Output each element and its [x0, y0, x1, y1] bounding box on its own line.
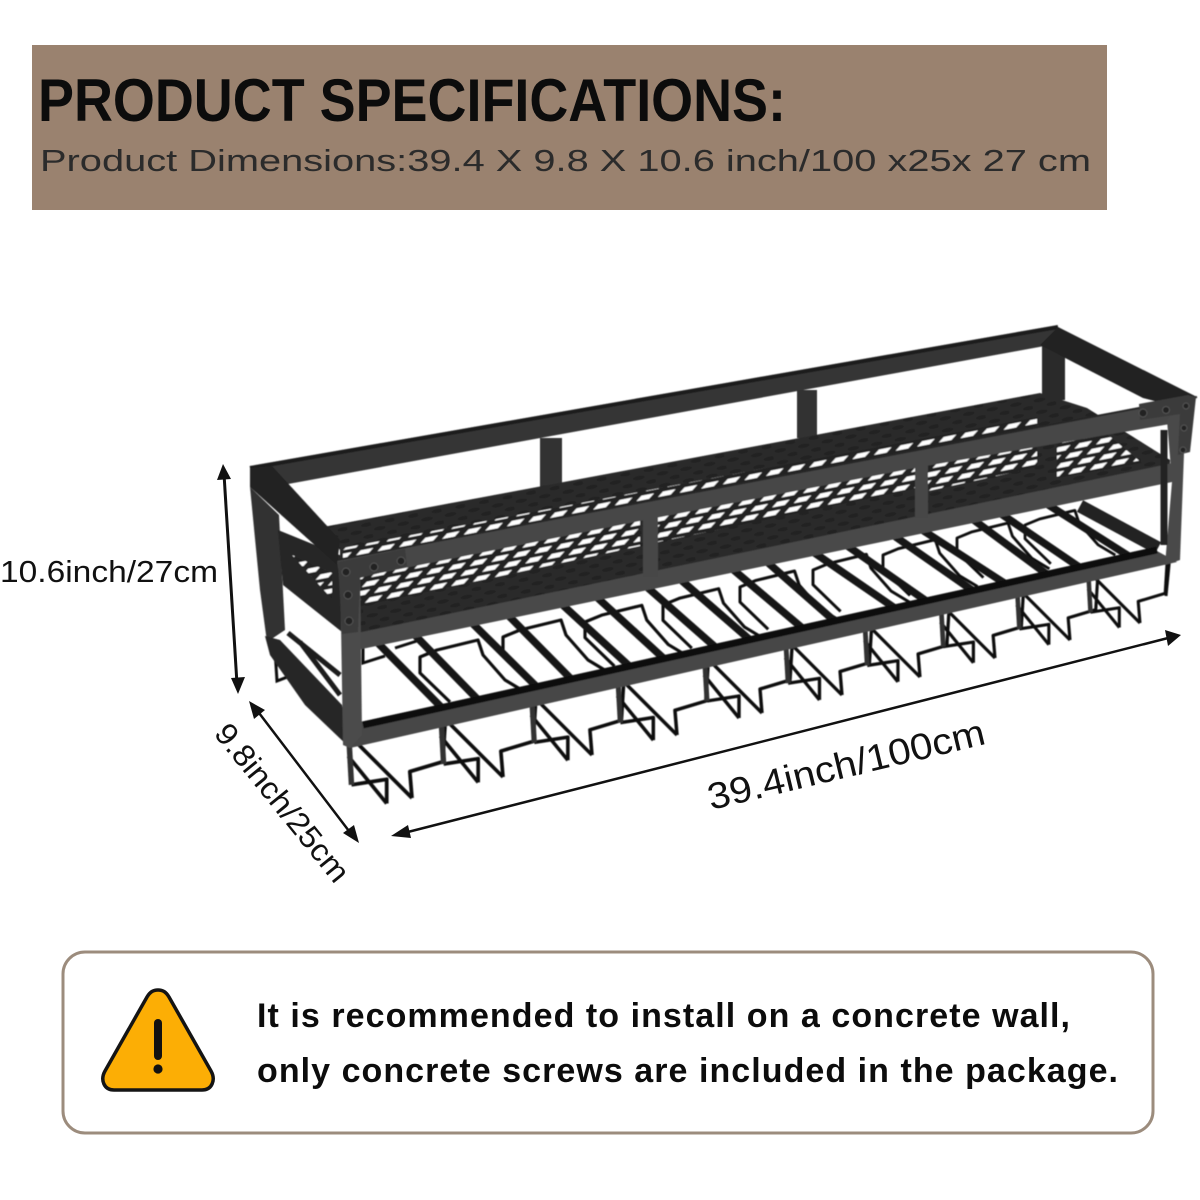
label: height: 10.6inch/27cm — [0, 554, 218, 589]
callout text: only concrete screws are included in the package. — [257, 1052, 1118, 1090]
product dimensions: Product Dimensions:39.4 X 9.8 X 10.6 inch/100 x25x 27 cm — [40, 143, 1091, 178]
upper wire loops — [363, 510, 1115, 702]
title: PRODUCT SPECIFICATIONS: — [38, 67, 786, 134]
label: depth: 9.8inch/25cm — [208, 716, 357, 889]
callout text — [257, 997, 1118, 1090]
wine rack illustration — [250, 327, 1197, 804]
front frame rails — [337, 397, 1197, 748]
dimension arrow: height — [217, 464, 245, 694]
dimension arrow: length — [391, 630, 1181, 838]
label: length: 39.4inch/100cm — [703, 712, 989, 818]
header banner — [32, 45, 1107, 210]
glass rail bars — [369, 499, 1158, 715]
corner brackets and rivets — [338, 395, 1196, 634]
top side rails — [250, 327, 1197, 565]
hanging glass hooks — [275, 555, 1170, 804]
icon: warning triangle — [103, 990, 213, 1090]
dimension arrow: depth — [249, 701, 359, 843]
back rail and posts — [250, 327, 1065, 488]
callout text: It is recommended to install on a concrete wall, — [257, 997, 1070, 1035]
callout panel — [63, 952, 1153, 1133]
left side frame — [250, 487, 350, 748]
upper shelf mesh — [323, 393, 1170, 640]
